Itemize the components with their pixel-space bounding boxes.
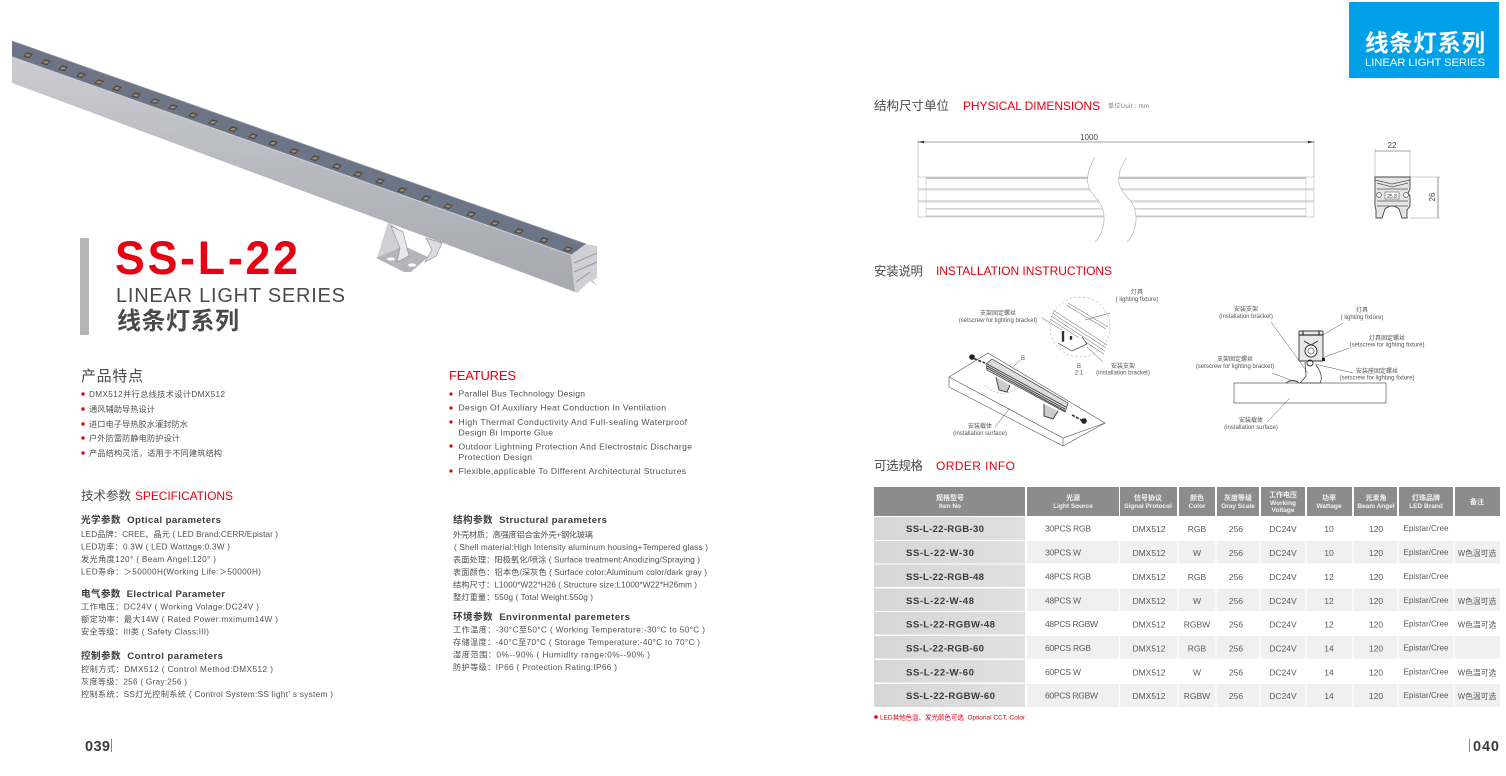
row SS-L-22-W-48: Epistar/Cree bbox=[1404, 596, 1449, 605]
row SS-L-22-RGBW-60: RGBW bbox=[1184, 691, 1210, 701]
heading: installation instructions bbox=[874, 264, 1112, 278]
row SS-L-22-RGB-60: 120 bbox=[1369, 644, 1383, 654]
spec group: control parameters: 控制系统：SS灯光控制系统 ( Control System:SS light’ s system ) bbox=[81, 689, 333, 699]
list: features en: Protection Design bbox=[458, 452, 532, 462]
heading: features en: FEATURES bbox=[449, 368, 516, 383]
list: product features zh: 进口电子导热胶水灌封防水 bbox=[89, 419, 188, 429]
spec group: control parameters: 灰度等级：256 ( Gray:256 ) bbox=[81, 676, 187, 686]
diagram: side installation: 安装载体 bbox=[1239, 416, 1263, 424]
spec group: environmental parameters: 防护等级：IP66 ( Protection Rating:IP66 ) bbox=[453, 662, 617, 672]
row SS-L-22-W-30: DMX512 bbox=[1132, 548, 1166, 558]
row SS-L-22-W-60: W色温可选 bbox=[1458, 668, 1496, 678]
row SS-L-22-RGBW-60: SS-L-22-RGBW-60 bbox=[906, 691, 995, 702]
spec group: environmental parameters bbox=[453, 611, 705, 672]
title block: 线条灯系列 bbox=[117, 308, 239, 335]
diagram: isometric installation: (setscrew for lighting bracket) bbox=[959, 318, 1037, 324]
row SS-L-22-RGB-48: 256 bbox=[1229, 572, 1243, 582]
list: features en: Flexible,applicable To Different Architectural Structures bbox=[458, 466, 686, 476]
table header: Iten No bbox=[939, 503, 961, 510]
row SS-L-22-RGBW-48: DMX512 bbox=[1132, 620, 1166, 630]
row SS-L-22-RGB-60: SS-L-22-RGB-60 bbox=[906, 644, 984, 654]
heading: installation instructions: 安装说明 bbox=[874, 264, 923, 278]
row SS-L-22-RGBW-48: 120 bbox=[1369, 620, 1383, 630]
row SS-L-22-RGB-48: 48PCS RGB bbox=[1045, 572, 1091, 582]
spec group: environmental parameters: 环境参数 Environmental paremeters bbox=[453, 611, 630, 623]
title block: SS-L-22 bbox=[115, 232, 298, 284]
row SS-L-22-RGB-60: DC24V bbox=[1269, 644, 1297, 654]
row SS-L-22-RGB-48: SS-L-22-RGB-48 bbox=[906, 572, 985, 583]
title block bbox=[80, 232, 345, 335]
row SS-L-22-RGBW-48: W色温可选 bbox=[1458, 620, 1496, 630]
row SS-L-22-RGBW-48: 48PCS RGBW bbox=[1045, 619, 1098, 629]
diagram: isometric installation: ( lighting fixture) bbox=[1116, 297, 1158, 303]
spec group: structural parameters: 结构参数 Structural parameters bbox=[453, 514, 607, 526]
diagram: side installation: 灯具 bbox=[1356, 306, 1368, 314]
page number 039: 039 bbox=[85, 739, 110, 755]
table header: Beam Angel bbox=[1357, 503, 1395, 510]
row SS-L-22-W-30: 30PCS W bbox=[1045, 548, 1081, 558]
list: product features zh: DMX512并行总线技术设计DMX512 bbox=[89, 389, 225, 399]
row SS-L-22-RGB-60: 14 bbox=[1324, 644, 1334, 654]
diagram: side installation: 安装支架 bbox=[1234, 305, 1258, 313]
row SS-L-22-W-30: Epistar/Cree bbox=[1404, 548, 1449, 557]
row SS-L-22-W-48: SS-L-22-W-48 bbox=[906, 596, 975, 607]
heading: specifications: 技术参数 bbox=[81, 488, 131, 503]
row SS-L-22-RGB-30: RGB bbox=[1188, 524, 1207, 534]
row SS-L-22-RGBW-60: 60PCS RGBW bbox=[1045, 690, 1098, 700]
row SS-L-22-RGBW-48: RGBW bbox=[1184, 620, 1210, 630]
row SS-L-22-W-48: 120 bbox=[1369, 596, 1383, 606]
row SS-L-22-RGBW-48: 12 bbox=[1324, 620, 1334, 630]
list: features en: Design Of Auxiliary Heat Conduction In Ventilation bbox=[458, 402, 666, 412]
row SS-L-22-RGB-30: 256 bbox=[1229, 524, 1243, 534]
row SS-L-22-W-60: DMX512 bbox=[1132, 668, 1166, 678]
spec group: electrical parameter: 额定功率：最大14W ( Rated Power:mximum14W ) bbox=[81, 614, 278, 624]
row SS-L-22-W-60: DC24V bbox=[1269, 668, 1297, 678]
row SS-L-22-W-60: 60PCS W bbox=[1045, 667, 1081, 677]
spec group: control parameters: 控制参数 Control parameters bbox=[81, 650, 223, 662]
row SS-L-22-RGB-48: 120 bbox=[1369, 572, 1383, 582]
heading: specifications: SPECIFICATIONS bbox=[135, 489, 233, 503]
spec group: environmental parameters: 工作温度：-30°C至50°C ( Working Temperature:-30°C to 50°C ) bbox=[453, 624, 705, 634]
table header: 光源 bbox=[1066, 493, 1080, 502]
row SS-L-22-RGB-30: DC24V bbox=[1269, 524, 1297, 534]
spec group: environmental parameters: 湿度范围：0%--90% ( Humidlty range:0%--90% ) bbox=[453, 650, 650, 660]
row SS-L-22-RGB-30: 10 bbox=[1324, 524, 1334, 534]
list: features en: Outdoor Lightning Protection And Electrostaic Discharge bbox=[458, 442, 692, 452]
row SS-L-22-RGBW-60: DMX512 bbox=[1132, 691, 1166, 701]
table header: 功率 bbox=[1322, 493, 1336, 502]
diagram: isometric installation bbox=[949, 288, 1158, 446]
row SS-L-22-W-48: W色温可选 bbox=[1458, 596, 1496, 606]
heading: specifications bbox=[81, 488, 233, 503]
diagram: side installation: (installation surface) bbox=[1224, 425, 1278, 431]
spec group: structural parameters: 结构尺寸：L1000*W22*H26 ( Structure size:L1000*W22*H26mm ) bbox=[453, 580, 697, 590]
diagram: isometric installation: 安装支架 bbox=[1111, 362, 1135, 370]
heading: physical dimensions: PHYSICAL DIMENSIONS bbox=[963, 99, 1100, 113]
row SS-L-22-RGB-30: SS-L-22-RGB-30 bbox=[906, 524, 984, 535]
table header: Signal Protocol bbox=[1124, 503, 1172, 510]
fixture on surface bbox=[986, 359, 1068, 412]
row SS-L-22-W-30: W色温可选 bbox=[1458, 548, 1496, 558]
LED dots bbox=[23, 52, 573, 252]
row SS-L-22-W-60: W bbox=[1193, 668, 1201, 678]
drawing: bar end section bbox=[1375, 141, 1440, 218]
bar end cap bbox=[571, 244, 597, 293]
drawing: bar end section: 26 bbox=[1428, 192, 1437, 201]
list: product features zh: 产品结构灵活，适用于不同建筑结构 bbox=[89, 448, 222, 458]
diagram: side installation: (setscrew for lighting fixture) bbox=[1339, 376, 1415, 382]
list: features en: Design Bi Importe Glue bbox=[458, 428, 553, 438]
spec group: structural parameters: 表面颜色：铝本色/深灰色 ( Surface color:Aluminum color/dark gray ) bbox=[453, 567, 707, 577]
table header: 信号协议 bbox=[1134, 493, 1162, 502]
heading: order info: ORDER INFO bbox=[936, 459, 1015, 473]
row SS-L-22-RGBW-60: Epistar/Cree bbox=[1404, 691, 1449, 700]
spec group: control parameters: 控制方式：DMX512 ( Control Method:DMX512 ) bbox=[81, 664, 273, 674]
diagram: side installation: 安装座固定螺丝 bbox=[1356, 367, 1398, 375]
row SS-L-22-RGB-60: DMX512 bbox=[1132, 644, 1166, 654]
diagram: isometric installation: B bbox=[1077, 364, 1081, 370]
row SS-L-22-RGBW-48 bbox=[906, 619, 1496, 630]
table header: Working bbox=[1270, 500, 1296, 507]
row SS-L-22-W-30: DC24V bbox=[1269, 548, 1297, 558]
diagram: side installation: (installation bracket) bbox=[1219, 314, 1273, 320]
spec group: electrical parameter: 安全等级：III类 ( Safety Class:III) bbox=[81, 626, 209, 636]
row SS-L-22-RGB-60: Epistar/Cree bbox=[1404, 644, 1449, 652]
diagram: isometric installation: 2:1 bbox=[1075, 370, 1084, 376]
spec group: electrical parameter: 工作电压：DC24V ( Working Volage:DC24V ) bbox=[81, 602, 259, 612]
row SS-L-22-W-30: 256 bbox=[1229, 548, 1243, 558]
table header: 备注 bbox=[1470, 497, 1484, 506]
row SS-L-22-RGBW-60 bbox=[906, 690, 1496, 702]
row SS-L-22-RGBW-48: Epistar/Cree bbox=[1404, 620, 1449, 628]
axis break bbox=[1088, 157, 1136, 242]
drawing: bar end section: 22 bbox=[1388, 141, 1397, 150]
row SS-L-22-W-48: 12 bbox=[1324, 596, 1334, 606]
row SS-L-22-RGBW-60: DC24V bbox=[1269, 691, 1297, 701]
diagram: side installation: 支架固定螺丝 bbox=[1217, 355, 1253, 363]
series tab bbox=[1349, 2, 1499, 78]
row SS-L-22-W-48: 256 bbox=[1229, 596, 1243, 606]
row SS-L-22-W-48: DC24V bbox=[1269, 596, 1297, 606]
row SS-L-22-RGB-30: 30PCS RGB bbox=[1045, 524, 1091, 534]
row SS-L-22-W-60 bbox=[906, 667, 1496, 678]
heading: physical dimensions: 单位Uuit : mm bbox=[1108, 102, 1149, 110]
row SS-L-22-W-30: 10 bbox=[1324, 548, 1334, 558]
row SS-L-22-W-60: SS-L-22-W-60 bbox=[906, 668, 974, 678]
product photo: linear light bar bbox=[12, 41, 597, 293]
list: product features zh: 通风辅助导热设计 bbox=[89, 404, 155, 414]
diagram: side installation: 灯具固定螺丝 bbox=[1369, 334, 1405, 342]
list: product features zh bbox=[81, 389, 225, 458]
row SS-L-22-RGBW-60: 256 bbox=[1229, 691, 1243, 701]
row SS-L-22-W-48: DMX512 bbox=[1132, 596, 1166, 606]
heading: physical dimensions: 结构尺寸单位 bbox=[874, 98, 949, 113]
spec group: optical parameters: LED功率：0.3W ( LED Wattage:0.3W ) bbox=[81, 542, 230, 552]
list: features en: High Thermal Conductivity And Full-sealing Waterproof bbox=[458, 417, 688, 427]
spec group: structural parameters: ( Shell material:High Intensity aluminum housing+Tempered glass ) bbox=[454, 543, 708, 552]
row SS-L-22-RGB-48: DC24V bbox=[1269, 572, 1297, 582]
heading: installation instructions: INSTALLATION INSTRUCTIONS bbox=[936, 264, 1112, 278]
page number 040: 040 bbox=[1473, 739, 1499, 755]
row SS-L-22-RGBW-60: 120 bbox=[1369, 691, 1383, 701]
diagram: side installation bbox=[1196, 305, 1425, 431]
row SS-L-22-W-60: 120 bbox=[1369, 668, 1383, 678]
drawing: bar side view: 1000 bbox=[1080, 133, 1098, 142]
mounting bracket bbox=[376, 222, 442, 272]
row SS-L-22-W-60: Epistar/Cree bbox=[1404, 668, 1449, 676]
callouts: 灯具 bbox=[1131, 288, 1143, 296]
row SS-L-22-RGB-60 bbox=[906, 643, 1449, 654]
table header: 灰度等级 bbox=[1224, 493, 1252, 502]
table header: 规格型号 bbox=[936, 493, 964, 502]
title block: LINEAR LIGHT SERIES bbox=[116, 285, 345, 307]
heading: order info: 可选规格 bbox=[874, 458, 923, 473]
heading: order info bbox=[874, 458, 1015, 473]
list: features en: Parallel Bus Technology Design bbox=[458, 388, 585, 398]
row SS-L-22-RGB-48: 12 bbox=[1324, 572, 1334, 582]
drawing: bar end section: 25.8 bbox=[1387, 194, 1397, 200]
diagram: side installation: (setscrew for lighting fixture) bbox=[1349, 342, 1425, 348]
row SS-L-22-RGB-60: 256 bbox=[1229, 644, 1243, 654]
series tab: LINEAR LIGHT SERIES bbox=[1365, 57, 1485, 69]
row SS-L-22-RGB-48: Epistar/Cree bbox=[1404, 572, 1449, 581]
table header: Gray Scale bbox=[1221, 503, 1255, 510]
row SS-L-22-RGBW-48: DC24V bbox=[1269, 620, 1297, 630]
row SS-L-22-RGB-30: DMX512 bbox=[1132, 524, 1166, 534]
spec group: optical parameters: LED寿命：＞50000H(Working Life:＞50000H) bbox=[81, 566, 261, 576]
table header: 工作电压 bbox=[1269, 490, 1297, 499]
diagram: isometric installation: 支架固定螺丝 bbox=[980, 309, 1016, 317]
row SS-L-22-W-30: SS-L-22-W-30 bbox=[906, 548, 974, 559]
list: product features zh: 户外防雷防静电防护设计 bbox=[89, 433, 180, 443]
table header: 灯珠品牌 bbox=[1412, 493, 1440, 502]
row SS-L-22-RGBW-48: SS-L-22-RGBW-48 bbox=[906, 620, 996, 630]
series tab: 线条灯系列 bbox=[1365, 30, 1485, 56]
table header: Voltage bbox=[1272, 507, 1295, 514]
table header: LED Brand bbox=[1409, 503, 1443, 510]
footnote: LED其他色温、发光颜色可选 Optional CCT, Color bbox=[880, 712, 1026, 722]
table header: Color bbox=[1189, 503, 1206, 510]
table header: 颜色 bbox=[1190, 493, 1204, 502]
table header bbox=[874, 487, 1500, 516]
diagram: isometric installation: B bbox=[1021, 356, 1025, 362]
spec group: electrical parameter bbox=[81, 588, 278, 636]
row SS-L-22-RGB-30: 120 bbox=[1369, 524, 1383, 534]
spec group: structural parameters: 外壳材质：高强度铝合金外壳+钢化玻璃 bbox=[453, 530, 593, 540]
row SS-L-22-W-60: 256 bbox=[1229, 668, 1243, 678]
row SS-L-22-RGB-30: Epistar/Cree bbox=[1404, 524, 1449, 533]
row SS-L-22-RGB-48: DMX512 bbox=[1132, 572, 1166, 582]
row SS-L-22-RGBW-60: W色温可选 bbox=[1458, 691, 1496, 701]
row SS-L-22-RGB-60: 60PCS RGB bbox=[1045, 643, 1091, 653]
row SS-L-22-W-48 bbox=[906, 596, 1496, 607]
row SS-L-22-RGB-60: RGB bbox=[1188, 644, 1207, 654]
spec group: structural parameters: 表面处理：阳极氧化/喷涂 ( Surface treatment:Anodizing/Spraying ) bbox=[453, 554, 700, 564]
row SS-L-22-W-48: 48PCS W bbox=[1045, 596, 1081, 606]
spec group: structural parameters: 整灯重量：550g ( Total Weight:550g ) bbox=[453, 592, 593, 602]
row SS-L-22-W-30: W bbox=[1193, 548, 1201, 558]
row SS-L-22-W-60: 14 bbox=[1324, 668, 1334, 678]
spec group: optical parameters bbox=[81, 514, 278, 576]
diagram: isometric installation: (installation bracket) bbox=[1096, 370, 1150, 376]
table header: Light Source bbox=[1053, 503, 1093, 510]
spec group: electrical parameter: 电气参数 Electrical Parameter bbox=[81, 588, 225, 600]
spec group: environmental parameters: 存储温度：-40°C至70°C ( Storage Temperature:-40°C to 70°C ) bbox=[453, 637, 700, 647]
spec group: optical parameters: 光学参数 Optical parameters bbox=[81, 514, 221, 526]
mounting surface bbox=[949, 353, 1105, 446]
diagram: isometric installation: 安装载体 bbox=[968, 422, 992, 430]
table row backgrounds bbox=[874, 517, 1500, 707]
heading: physical dimensions bbox=[874, 98, 1149, 113]
spec group: optical parameters: 发光角度120° ( Beam Angel:120° ) bbox=[81, 554, 216, 564]
row SS-L-22-RGB-48 bbox=[906, 572, 1449, 583]
diagram: side installation: ( lighting fixture) bbox=[1341, 315, 1383, 321]
list: features en bbox=[449, 388, 692, 476]
table header: Wattage bbox=[1316, 503, 1342, 510]
row SS-L-22-W-48: W bbox=[1193, 596, 1201, 606]
row SS-L-22-RGBW-48: 256 bbox=[1229, 620, 1243, 630]
detail circle bbox=[1050, 297, 1110, 357]
row SS-L-22-RGBW-60: 14 bbox=[1324, 691, 1334, 701]
row SS-L-22-W-30 bbox=[906, 548, 1496, 559]
diagram: isometric installation: (installation surface) bbox=[953, 431, 1007, 437]
drawing: bar side view bbox=[918, 133, 1314, 242]
diagram: side installation: (setscrew for lighting bracket) bbox=[1196, 364, 1274, 370]
table header: 光束角 bbox=[1366, 493, 1386, 502]
leaders bbox=[995, 313, 1110, 427]
table: order info bbox=[874, 487, 1500, 707]
spec group: control parameters bbox=[81, 650, 333, 699]
row SS-L-22-RGB-48: RGB bbox=[1188, 572, 1207, 582]
spec group: structural parameters bbox=[453, 514, 708, 602]
row SS-L-22-W-30: 120 bbox=[1369, 548, 1383, 558]
heading: product features zh: 产品特点 bbox=[81, 368, 143, 385]
spec group: optical parameters: LED品牌：CREE、晶元 ( LED Brand:CERR/Epistar ) bbox=[81, 529, 278, 539]
row SS-L-22-RGB-30 bbox=[906, 524, 1449, 535]
